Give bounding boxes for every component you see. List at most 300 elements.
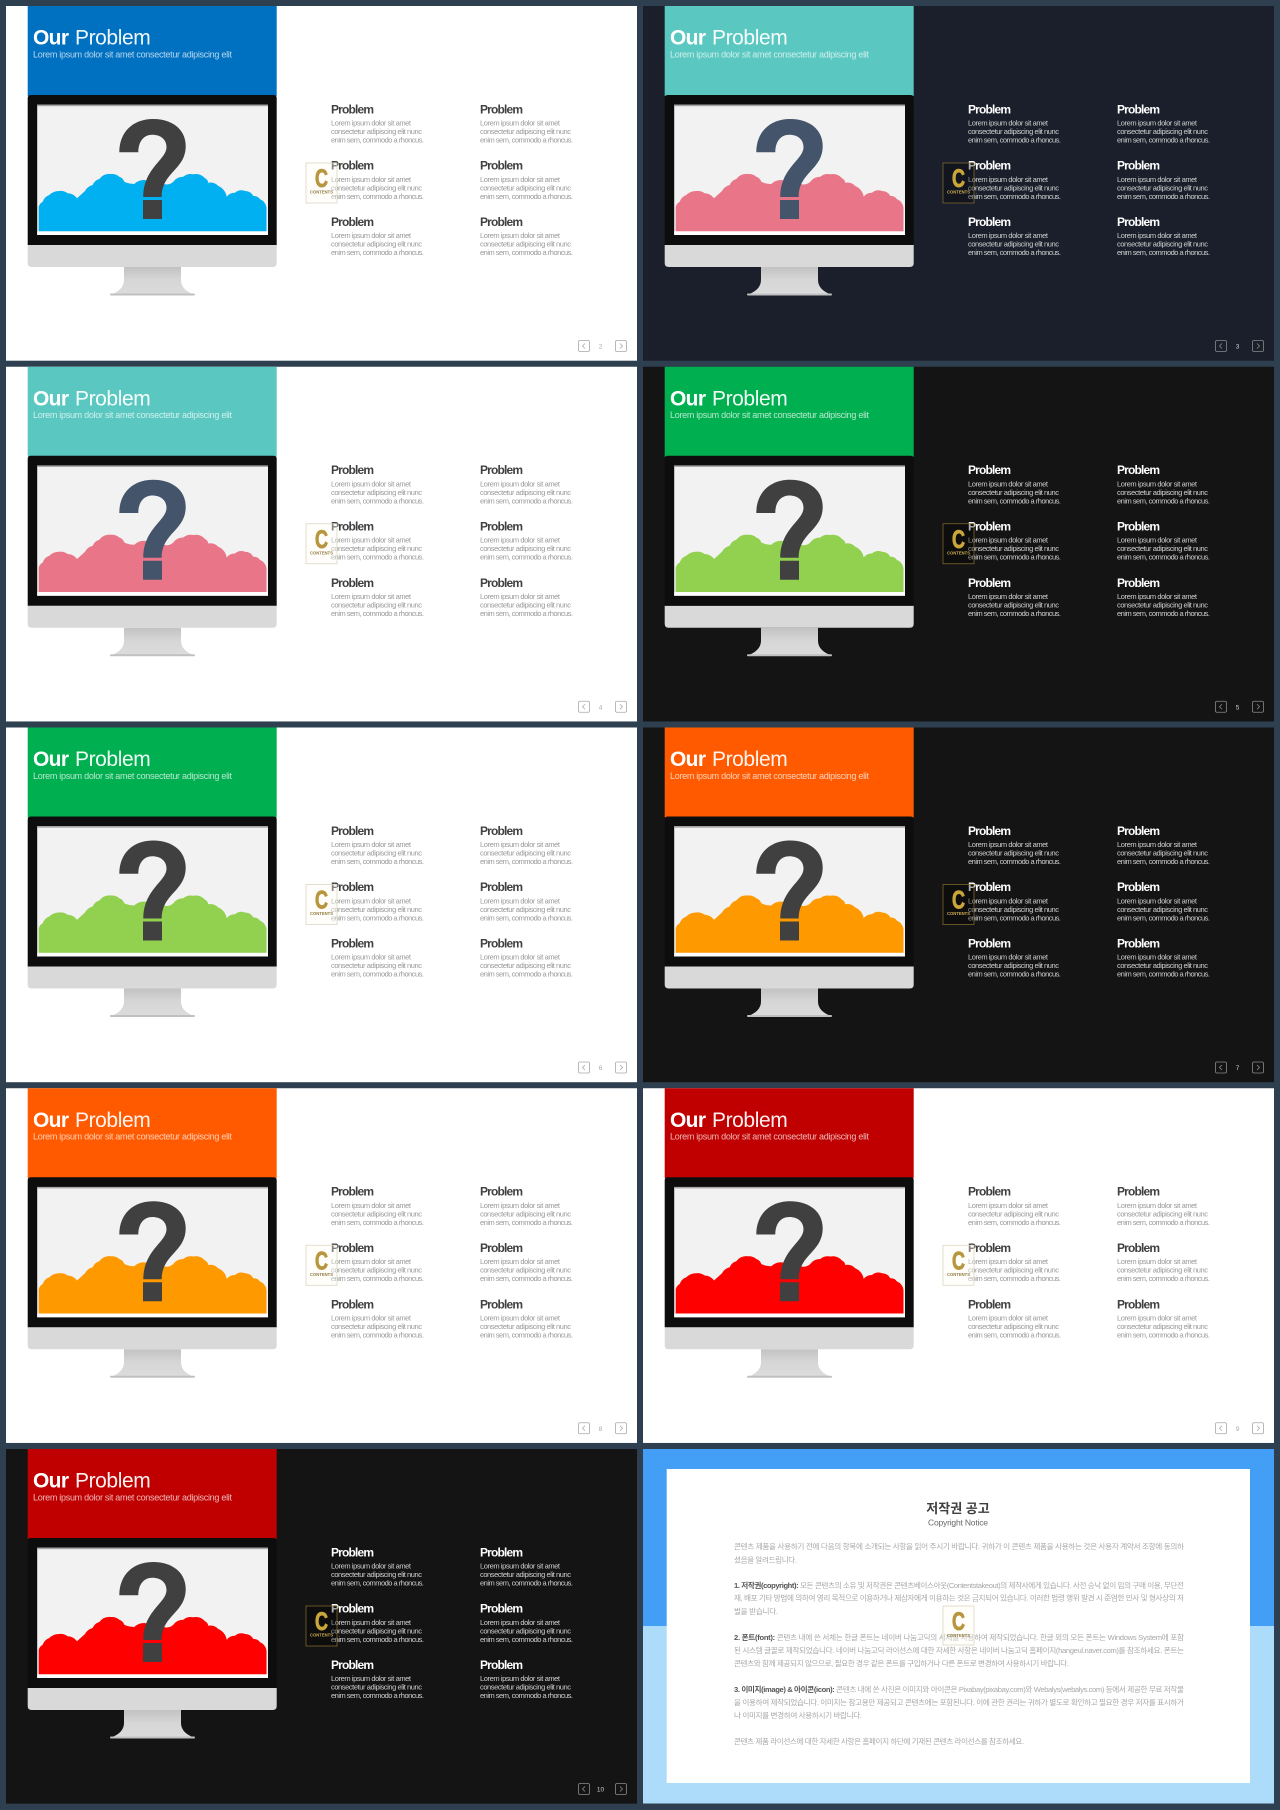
problem items: enim sem, commodo a rhoncus. (480, 553, 573, 562)
watermark (306, 1606, 337, 1646)
notice body text: 3. 이미지(image) & 아이콘(icon): 콘텐츠 내에 쓴 사진은 이미지와 아이콘은 Pixabay(pixabay.com)와 Webalys(webalys.com) 등에서 제공한 무료 저작물 (734, 1684, 1184, 1694)
problem items: enim sem, commodo a rhoncus. (331, 136, 424, 144)
pager (1216, 1062, 1264, 1073)
pager (1216, 340, 1264, 352)
header band: Lorem ipsum dolor sit amet consectetur adipiscing elit (670, 1132, 869, 1142)
problem items: Problem (968, 102, 1011, 116)
problem items: enim sem, commodo a rhoncus. (480, 1578, 573, 1588)
watermark (306, 1245, 337, 1285)
problem items: consectetur adipiscing elit nunc (480, 240, 571, 249)
problem items: Lorem ipsum dolor sit amet (480, 175, 561, 184)
problem items: enim sem, commodo a rhoncus. (331, 1274, 424, 1283)
problem items: Problem (1117, 880, 1160, 894)
problem items: Problem (1117, 824, 1160, 838)
monitor illustration (665, 95, 914, 296)
problem items: enim sem, commodo a rhoncus. (1117, 496, 1210, 505)
problem items: Lorem ipsum dolor sit amet (1117, 1201, 1198, 1210)
problem items: Problem (480, 102, 523, 116)
problem items: enim sem, commodo a rhoncus. (331, 1635, 424, 1644)
problem items: consectetur adipiscing elit nunc (968, 240, 1059, 249)
problem items: consectetur adipiscing elit nunc (331, 240, 422, 249)
problem items: consectetur adipiscing elit nunc (1117, 488, 1208, 497)
watermark (306, 163, 337, 203)
problem items: Lorem ipsum dolor sit amet (480, 1257, 561, 1266)
notice title: 저작권 공고 (926, 1501, 990, 1516)
problem items: enim sem, commodo a rhoncus. (968, 609, 1061, 618)
problem items: Lorem ipsum dolor sit amet (331, 479, 412, 488)
problem items: enim sem, commodo a rhoncus. (968, 192, 1061, 201)
problem items: Problem (480, 463, 523, 477)
problem items: enim sem, commodo a rhoncus. (480, 1330, 573, 1339)
watermark: C (952, 1608, 965, 1636)
problem items: Problem (331, 1658, 374, 1672)
problem items: Lorem ipsum dolor sit amet (480, 592, 561, 601)
problem items: Problem (331, 1602, 374, 1616)
problem items: enim sem, commodo a rhoncus. (480, 192, 573, 201)
problem items: Lorem ipsum dolor sit amet (968, 840, 1049, 849)
header band: Our (670, 387, 706, 410)
header band (28, 728, 277, 818)
problem items: Lorem ipsum dolor sit amet (331, 1618, 412, 1627)
problem items: enim sem, commodo a rhoncus. (480, 136, 573, 144)
problem items: Lorem ipsum dolor sit amet (968, 896, 1049, 905)
header band: Our (670, 27, 706, 50)
problem items: Lorem ipsum dolor sit amet (1117, 118, 1198, 128)
problem items: Problem (331, 936, 374, 950)
problem items (968, 102, 1210, 257)
problem items: Lorem ipsum dolor sit amet (968, 1313, 1049, 1322)
problem items: Problem (480, 1185, 523, 1199)
problem items: Lorem ipsum dolor sit amet (480, 536, 561, 545)
header band: Lorem ipsum dolor sit amet consectetur adipiscing elit (33, 49, 232, 59)
problem items: Lorem ipsum dolor sit amet (480, 231, 561, 240)
notice title (926, 1501, 990, 1528)
problem items: enim sem, commodo a rhoncus. (1117, 136, 1210, 144)
problem items: Lorem ipsum dolor sit amet (480, 1674, 561, 1683)
white notice card (667, 1469, 1250, 1783)
notice body text: 나 이미지를 변경하여 사용하시기 바랍니다. (734, 1710, 862, 1720)
problem items: Problem (480, 215, 523, 229)
problem items: consectetur adipiscing elit nunc (480, 488, 571, 497)
problem items: Problem (1117, 519, 1160, 533)
problem items: Problem (480, 936, 523, 950)
problem items: consectetur adipiscing elit nunc (1117, 127, 1208, 136)
problem items: Problem (331, 880, 374, 894)
watermark: CONTENTS (947, 911, 970, 916)
problem items: consectetur adipiscing elit nunc (968, 1266, 1059, 1275)
watermark (943, 1245, 974, 1285)
problem items (331, 102, 573, 257)
problem items: Lorem ipsum dolor sit amet (331, 1562, 412, 1570)
notice title: Copyright Notice (928, 1518, 988, 1528)
problem items: Lorem ipsum dolor sit amet (331, 840, 412, 849)
header band: Our (33, 27, 69, 50)
notice body text: 2. 폰트(font): 콘텐츠 내에 쓴 서체는 한글 폰트는 네이버 나눔고딕의 서체를 사용하여 제작되었습니다. 한글 외의 모든 폰트는 Windows System에 포함 (734, 1632, 1184, 1642)
problem items: Lorem ipsum dolor sit amet (1117, 840, 1198, 849)
problem items: enim sem, commodo a rhoncus. (480, 248, 573, 257)
problem items: enim sem, commodo a rhoncus. (968, 496, 1061, 505)
header band (665, 367, 914, 457)
problem items: Problem (331, 576, 374, 590)
pager (578, 1423, 626, 1434)
header band: Problem (712, 1109, 788, 1132)
problem items: enim sem, commodo a rhoncus. (331, 1330, 424, 1339)
problem items: enim sem, commodo a rhoncus. (331, 248, 424, 257)
problem items: consectetur adipiscing elit nunc (331, 600, 422, 609)
problem items: consectetur adipiscing elit nunc (331, 1266, 422, 1275)
problem items: enim sem, commodo a rhoncus. (331, 1218, 424, 1227)
watermark: CONTENTS (947, 1272, 970, 1277)
notice body text: 콘텐츠 제품 라이선스에 대한 자세한 사항은 홈페이지 하단에 기재된 콘텐츠 라이선스를 참조하세요. (734, 1736, 1024, 1746)
problem items: Lorem ipsum dolor sit amet (1117, 896, 1198, 905)
watermark: CONTENTS (947, 550, 970, 555)
slide 3: teal on navy (643, 6, 1274, 361)
problem items: Problem (968, 1241, 1011, 1255)
problem items: enim sem, commodo a rhoncus. (480, 496, 573, 505)
problem items (968, 1185, 1210, 1339)
problem items: Problem (968, 824, 1011, 838)
problem items: Problem (480, 159, 523, 173)
problem items (331, 824, 573, 979)
problem items: enim sem, commodo a rhoncus. (968, 857, 1061, 866)
problem items: Problem (331, 519, 374, 533)
slide 11: copyright notice (643, 1449, 1274, 1804)
header band: Our (33, 1109, 69, 1132)
problem items: enim sem, commodo a rhoncus. (331, 609, 424, 618)
problem items: consectetur adipiscing elit nunc (968, 488, 1059, 497)
problem items: consectetur adipiscing elit nunc (968, 905, 1059, 914)
problem items: consectetur adipiscing elit nunc (331, 183, 422, 192)
pager (1216, 701, 1264, 712)
header band (665, 1088, 914, 1178)
problem items: Problem (968, 159, 1011, 173)
problem items: Problem (968, 936, 1011, 950)
header band: Lorem ipsum dolor sit amet consectetur adipiscing elit (33, 410, 232, 420)
watermark: CONTENTS (947, 190, 970, 194)
watermark (943, 524, 974, 564)
problem items: Lorem ipsum dolor sit amet (331, 1313, 412, 1322)
slide 9: red on white (643, 1088, 1274, 1443)
problem items: consectetur adipiscing elit nunc (968, 600, 1059, 609)
problem items: Lorem ipsum dolor sit amet (968, 175, 1049, 184)
monitor illustration (28, 1538, 277, 1738)
header band (28, 6, 277, 96)
problem items: Lorem ipsum dolor sit amet (331, 896, 412, 905)
header band: Lorem ipsum dolor sit amet consectetur adipiscing elit (670, 771, 869, 781)
problem items: enim sem, commodo a rhoncus. (480, 857, 573, 866)
problem items: enim sem, commodo a rhoncus. (480, 1691, 573, 1700)
problem items: Problem (1117, 1185, 1160, 1199)
problem items: Problem (331, 159, 374, 173)
problem items: enim sem, commodo a rhoncus. (968, 553, 1061, 562)
watermark (943, 163, 974, 203)
problem items: Lorem ipsum dolor sit amet (1117, 175, 1198, 184)
pager (578, 1784, 626, 1794)
problem items: Lorem ipsum dolor sit amet (331, 592, 412, 601)
problem items: enim sem, commodo a rhoncus. (331, 192, 424, 201)
problem items: Lorem ipsum dolor sit amet (968, 1201, 1049, 1210)
problem items: consectetur adipiscing elit nunc (331, 127, 422, 136)
problem items: enim sem, commodo a rhoncus. (1117, 553, 1210, 562)
problem items: Problem (968, 1185, 1011, 1199)
pager: 6 (599, 1065, 603, 1072)
problem items (968, 824, 1210, 979)
problem items: Problem (331, 463, 374, 477)
watermark: CONTENTS (310, 550, 333, 555)
problem items: Problem (968, 463, 1011, 477)
problem items: Lorem ipsum dolor sit amet (968, 592, 1049, 601)
problem items: enim sem, commodo a rhoncus. (480, 970, 573, 979)
watermark (306, 884, 337, 924)
problem items: Lorem ipsum dolor sit amet (331, 231, 412, 240)
watermark: C (315, 165, 328, 193)
problem items: Problem (968, 1297, 1011, 1311)
problem items: Problem (1117, 1241, 1160, 1255)
pager: 8 (599, 1426, 603, 1433)
problem items: Problem (480, 1545, 523, 1559)
problem items: consectetur adipiscing elit nunc (331, 1683, 422, 1692)
monitor illustration (665, 456, 914, 656)
monitor illustration (665, 816, 914, 1017)
problem items: consectetur adipiscing elit nunc (1117, 1209, 1208, 1218)
header band: Problem (75, 1109, 151, 1132)
watermark: CONTENTS (310, 1272, 333, 1277)
problem items: consectetur adipiscing elit nunc (968, 848, 1059, 858)
problem items: Problem (968, 880, 1011, 894)
watermark: C (315, 1247, 328, 1275)
problem items: Lorem ipsum dolor sit amet (968, 231, 1049, 240)
problem items: consectetur adipiscing elit nunc (480, 1683, 571, 1692)
problem items: Problem (968, 576, 1011, 590)
problem items: consectetur adipiscing elit nunc (968, 1322, 1059, 1331)
problem items: consectetur adipiscing elit nunc (1117, 544, 1208, 553)
problem items: consectetur adipiscing elit nunc (331, 961, 422, 970)
problem items: Lorem ipsum dolor sit amet (331, 536, 412, 545)
problem items: consectetur adipiscing elit nunc (968, 544, 1059, 553)
problem items: Problem (331, 1297, 374, 1311)
monitor illustration (28, 1177, 277, 1378)
problem items: Problem (480, 824, 523, 838)
problem items: Lorem ipsum dolor sit amet (480, 1313, 561, 1322)
problem items: consectetur adipiscing elit nunc (331, 488, 422, 497)
header band: Lorem ipsum dolor sit amet consectetur adipiscing elit (33, 771, 232, 781)
problem items: consectetur adipiscing elit nunc (480, 1322, 571, 1331)
problem items: Lorem ipsum dolor sit amet (480, 953, 561, 962)
problem items: consectetur adipiscing elit nunc (1117, 240, 1208, 249)
problem items: Problem (480, 1297, 523, 1311)
problem items: Lorem ipsum dolor sit amet (331, 175, 412, 184)
problem items: Lorem ipsum dolor sit amet (968, 953, 1049, 962)
problem items: Lorem ipsum dolor sit amet (331, 118, 412, 128)
problem items: enim sem, commodo a rhoncus. (331, 1691, 424, 1700)
problem items: Lorem ipsum dolor sit amet (331, 953, 412, 962)
slide 6: green on white (6, 728, 637, 1082)
header band: Lorem ipsum dolor sit amet consectetur adipiscing elit (670, 410, 869, 420)
problem items: consectetur adipiscing elit nunc (1117, 848, 1208, 858)
problem items: Lorem ipsum dolor sit amet (480, 896, 561, 905)
pager: 7 (1236, 1065, 1240, 1072)
problem items: consectetur adipiscing elit nunc (331, 1570, 422, 1579)
slide 7: orange on black (643, 728, 1274, 1082)
pager (578, 340, 626, 352)
problem items: consectetur adipiscing elit nunc (480, 848, 571, 858)
problem items: consectetur adipiscing elit nunc (968, 1209, 1059, 1218)
problem items: enim sem, commodo a rhoncus. (331, 496, 424, 505)
problem items: enim sem, commodo a rhoncus. (968, 970, 1061, 979)
problem items: enim sem, commodo a rhoncus. (968, 913, 1061, 922)
problem items: consectetur adipiscing elit nunc (1117, 1266, 1208, 1275)
problem items: consectetur adipiscing elit nunc (968, 127, 1059, 136)
problem items: enim sem, commodo a rhoncus. (1117, 609, 1210, 618)
problem items (331, 1185, 573, 1339)
header band (665, 6, 914, 96)
problem items: Problem (331, 215, 374, 229)
watermark: CONTENTS (310, 1632, 333, 1638)
problem items: consectetur adipiscing elit nunc (1117, 600, 1208, 609)
problem items: consectetur adipiscing elit nunc (331, 544, 422, 553)
problem items: Lorem ipsum dolor sit amet (1117, 536, 1198, 545)
slide 2: blue on white (6, 6, 637, 361)
problem items: Lorem ipsum dolor sit amet (968, 479, 1049, 488)
problem items: Lorem ipsum dolor sit amet (480, 840, 561, 849)
notice body text: 셨음을 알려드립니다. (734, 1554, 797, 1564)
problem items: Problem (1117, 576, 1160, 590)
monitor illustration (665, 1177, 914, 1378)
problem items: enim sem, commodo a rhoncus. (1117, 192, 1210, 201)
problem items: Problem (480, 519, 523, 533)
problem items: Problem (331, 824, 374, 838)
problem items: enim sem, commodo a rhoncus. (1117, 857, 1210, 866)
problem items: consectetur adipiscing elit nunc (331, 848, 422, 858)
problem items: Lorem ipsum dolor sit amet (480, 1618, 561, 1627)
header band (28, 367, 277, 457)
problem items: Lorem ipsum dolor sit amet (480, 1201, 561, 1210)
problem items: enim sem, commodo a rhoncus. (331, 857, 424, 866)
problem items: enim sem, commodo a rhoncus. (480, 1635, 573, 1644)
problem items: enim sem, commodo a rhoncus. (968, 1330, 1061, 1339)
problem items: consectetur adipiscing elit nunc (331, 1322, 422, 1331)
problem items: Problem (1117, 159, 1160, 173)
notice body text (734, 1541, 1184, 1746)
problem items: Lorem ipsum dolor sit amet (968, 118, 1049, 128)
problem items: enim sem, commodo a rhoncus. (331, 913, 424, 922)
header band: Problem (75, 387, 151, 410)
problem items: Problem (1117, 1297, 1160, 1311)
two-tone blue background (643, 1449, 1274, 1804)
pager: 10 (597, 1786, 604, 1794)
problem items: consectetur adipiscing elit nunc (968, 183, 1059, 192)
monitor illustration (28, 816, 277, 1017)
watermark: C (315, 526, 328, 554)
problem items: Problem (480, 880, 523, 894)
problem items: enim sem, commodo a rhoncus. (1117, 1218, 1210, 1227)
header band: Problem (712, 748, 788, 771)
problem items: consectetur adipiscing elit nunc (480, 544, 571, 553)
problem items: Problem (1117, 463, 1160, 477)
watermark: C (952, 1247, 965, 1275)
watermark: C (952, 886, 965, 914)
monitor illustration (28, 456, 277, 656)
problem items: Lorem ipsum dolor sit amet (331, 1674, 412, 1683)
header band: Our (670, 748, 706, 771)
header band (28, 1088, 277, 1178)
slide 4: teal on white (6, 367, 637, 721)
problem items: Problem (480, 576, 523, 590)
problem items: enim sem, commodo a rhoncus. (968, 1218, 1061, 1227)
problem items: enim sem, commodo a rhoncus. (331, 970, 424, 979)
pager: 2 (599, 344, 603, 350)
problem items: consectetur adipiscing elit nunc (480, 1626, 571, 1635)
problem items: consectetur adipiscing elit nunc (968, 961, 1059, 970)
watermark: C (315, 1608, 328, 1636)
problem items: enim sem, commodo a rhoncus. (1117, 1274, 1210, 1283)
header band: Lorem ipsum dolor sit amet consectetur adipiscing elit (33, 1492, 232, 1502)
watermark: C (952, 165, 965, 193)
pager: 5 (1236, 704, 1240, 711)
header band: Problem (712, 387, 788, 410)
problem items: Problem (1117, 936, 1160, 950)
pager: 4 (599, 704, 603, 711)
problem items: Lorem ipsum dolor sit amet (1117, 592, 1198, 601)
problem items: enim sem, commodo a rhoncus. (480, 913, 573, 922)
problem items: consectetur adipiscing elit nunc (480, 905, 571, 914)
problem items: consectetur adipiscing elit nunc (480, 1209, 571, 1218)
problem items: consectetur adipiscing elit nunc (1117, 1322, 1208, 1331)
problem items: consectetur adipiscing elit nunc (1117, 183, 1208, 192)
header band (665, 728, 914, 818)
problem items: Lorem ipsum dolor sit amet (480, 1562, 561, 1570)
problem items: enim sem, commodo a rhoncus. (1117, 1330, 1210, 1339)
problem items: Lorem ipsum dolor sit amet (968, 1257, 1049, 1266)
header band: Our (670, 1109, 706, 1132)
problem items: Problem (1117, 102, 1160, 116)
problem items: Problem (480, 1658, 523, 1672)
problem items: enim sem, commodo a rhoncus. (1117, 913, 1210, 922)
problem items: enim sem, commodo a rhoncus. (1117, 248, 1210, 257)
notice body text: 벌을 받습니다. (734, 1606, 778, 1616)
pager: 3 (1236, 344, 1240, 350)
header band: Our (33, 748, 69, 771)
problem items: Problem (331, 102, 374, 116)
problem items: consectetur adipiscing elit nunc (480, 961, 571, 970)
problem items: consectetur adipiscing elit nunc (480, 1570, 571, 1579)
header band: Problem (75, 27, 151, 50)
problem items: Lorem ipsum dolor sit amet (1117, 953, 1198, 962)
problem items: enim sem, commodo a rhoncus. (331, 1578, 424, 1588)
notice body text: 재, 배포 기타 방법에 의하여 영리 목적으로 이용하거나 제삼자에게 이용하는 것은 금지되어 있습니다. 이러한 법령 행위 발견 시 준엄한 민사 및 형사상의 처 (734, 1592, 1184, 1602)
problem items: enim sem, commodo a rhoncus. (331, 553, 424, 562)
watermark (306, 524, 337, 564)
header band: Problem (75, 748, 151, 771)
problem items: Lorem ipsum dolor sit amet (331, 1201, 412, 1210)
pager: 9 (1236, 1426, 1240, 1433)
problem items: Lorem ipsum dolor sit amet (1117, 1313, 1198, 1322)
problem items (331, 463, 573, 618)
watermark (943, 1606, 974, 1645)
problem items: enim sem, commodo a rhoncus. (480, 1274, 573, 1283)
problem items: enim sem, commodo a rhoncus. (1117, 970, 1210, 979)
notice body text: 콘텐츠 제품을 사용하기 전에 다음의 항목에 소개되는 사항을 읽어 주시기 바랍니다. 귀하가 이 콘텐츠 제품을 사용하는 것은 사용자 계약서 조항에 동의하 (734, 1541, 1184, 1551)
problem items: enim sem, commodo a rhoncus. (968, 1274, 1061, 1283)
pager (578, 701, 626, 712)
problem items: consectetur adipiscing elit nunc (331, 1626, 422, 1635)
problem items: Problem (968, 519, 1011, 533)
slide 5: green on black (643, 367, 1274, 721)
watermark: CONTENTS (947, 1633, 970, 1638)
problem items: consectetur adipiscing elit nunc (1117, 905, 1208, 914)
header band: Our (33, 387, 69, 410)
slide 10: red on black (6, 1449, 637, 1804)
